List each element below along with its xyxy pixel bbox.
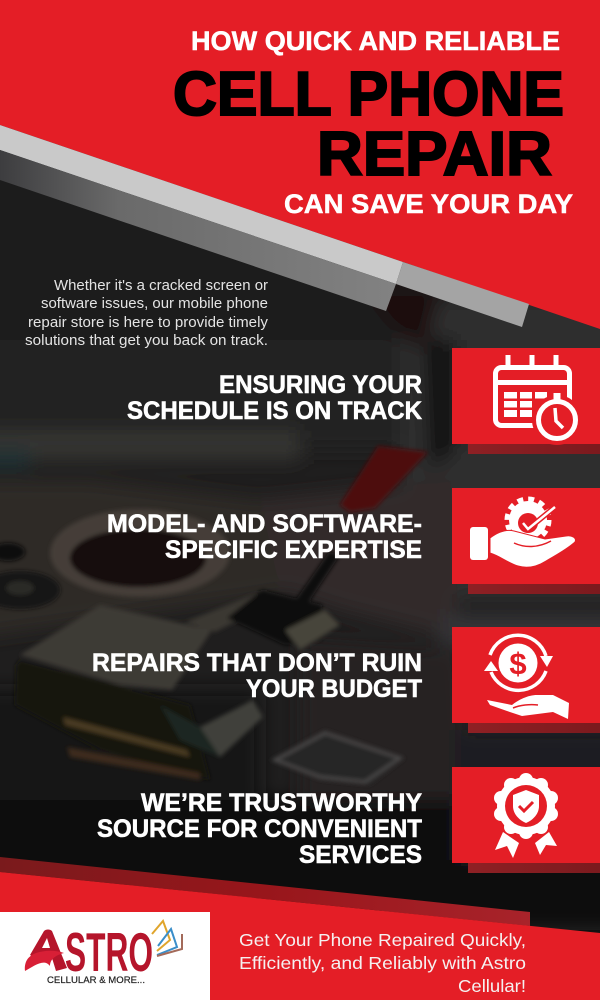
intro paragraph: [25, 278, 269, 349]
icon panel 3: money and hand: [452, 627, 600, 733]
icon: ribbon badge with shield: [494, 773, 558, 858]
intro paragraph: software issues, our mobile phone: [41, 296, 268, 312]
item 2 heading: [107, 510, 422, 564]
item 4 heading: SOURCE FOR CONVENIENT: [97, 815, 422, 843]
icon panel 4: trust badge: [452, 767, 600, 873]
item 3 heading: [92, 649, 422, 703]
footer call to action: Cellular!: [458, 976, 526, 996]
item 4 heading: [97, 789, 422, 869]
icon panel 2: hand with gear: [452, 488, 600, 594]
item 1 heading: [127, 371, 422, 425]
icon: calendar: [495, 355, 582, 445]
title line: cell phone: CELL PHONE: [173, 60, 564, 129]
footer dark red band: [0, 857, 530, 926]
item 3 heading: YOUR BUDGET: [246, 675, 422, 703]
logo panel: [0, 912, 210, 1000]
intro paragraph: solutions that get you back on track.: [25, 333, 268, 349]
title: [173, 26, 573, 219]
item 3 heading: REPAIRS THAT DON’T RUIN: [92, 649, 422, 677]
logo: A swoosh: [25, 930, 67, 971]
red header block: [0, 0, 600, 329]
item 4 heading: SERVICES: [299, 841, 422, 869]
footer call to action: Get Your Phone Repaired Quickly,: [239, 930, 526, 950]
item 2 heading: SPECIFIC EXPERTISE: [165, 536, 422, 564]
diagonal band: translucent end: [396, 262, 529, 327]
logo: STRO letters: STRO: [65, 921, 153, 983]
intro paragraph: Whether it's a cracked screen or: [54, 278, 268, 294]
footer call to action: [239, 930, 526, 996]
icon: hand holding gear and check: [470, 499, 575, 567]
title line: how quick and reliable: HOW QUICK AND RELIABLE: [191, 26, 560, 56]
icon: dollar cycle in hand: [484, 635, 569, 719]
icon panel 1: calendar and clock: [452, 348, 600, 454]
item 1 heading: ENSURING YOUR: [219, 371, 422, 399]
title line: repair: REPAIR: [317, 120, 552, 189]
logo: tagline: CELLULAR & MORE...: [47, 975, 145, 986]
item 2 heading: MODEL- AND SOFTWARE-: [107, 510, 422, 538]
item 4 heading: WE’RE TRUSTWORTHY: [141, 789, 422, 817]
title line: can save your day: CAN SAVE YOUR DAY: [284, 189, 573, 219]
diagonal band: light grey: [0, 125, 403, 284]
intro paragraph: repair store is here to provide timely: [28, 315, 269, 331]
logo: book pages: [152, 921, 182, 956]
footer call to action: Efficiently, and Reliably with Astro: [239, 953, 526, 973]
icon: dollar cycle in hand: $: [509, 646, 527, 681]
footer red block: [0, 872, 600, 1000]
diagonal band: mid grey: [0, 150, 396, 311]
item 1 heading: SCHEDULE IS ON TRACK: [127, 397, 422, 425]
